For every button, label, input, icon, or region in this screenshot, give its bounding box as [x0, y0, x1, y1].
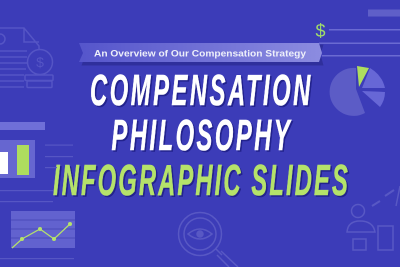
icon: magnifier with eye [178, 212, 238, 267]
bar chart panel [0, 122, 45, 178]
icon: document with coins [0, 28, 53, 88]
title line 3: INFOGRAPHIC SLIDES [53, 156, 348, 205]
icon: dollar sign: $ [315, 21, 326, 41]
ribbon banner [79, 43, 324, 66]
icon: person with shapes [347, 186, 400, 250]
title line 2: PHILOSOPHY [113, 113, 293, 161]
title line 2: PHILOSOPHY [112, 111, 292, 160]
line chart [11, 211, 75, 248]
icon: document with coins: $ [36, 54, 44, 70]
title line 3: INFOGRAPHIC SLIDES [54, 158, 350, 206]
pie chart [330, 66, 385, 116]
decorative lines top right [319, 10, 400, 56]
title line 1: COMPENSATION [90, 66, 311, 115]
title line 1: COMPENSATION [92, 68, 313, 116]
ribbon text: An Overview of Our Compensation Strategy [94, 48, 307, 60]
decorative lines left [0, 144, 74, 259]
title [53, 66, 350, 206]
